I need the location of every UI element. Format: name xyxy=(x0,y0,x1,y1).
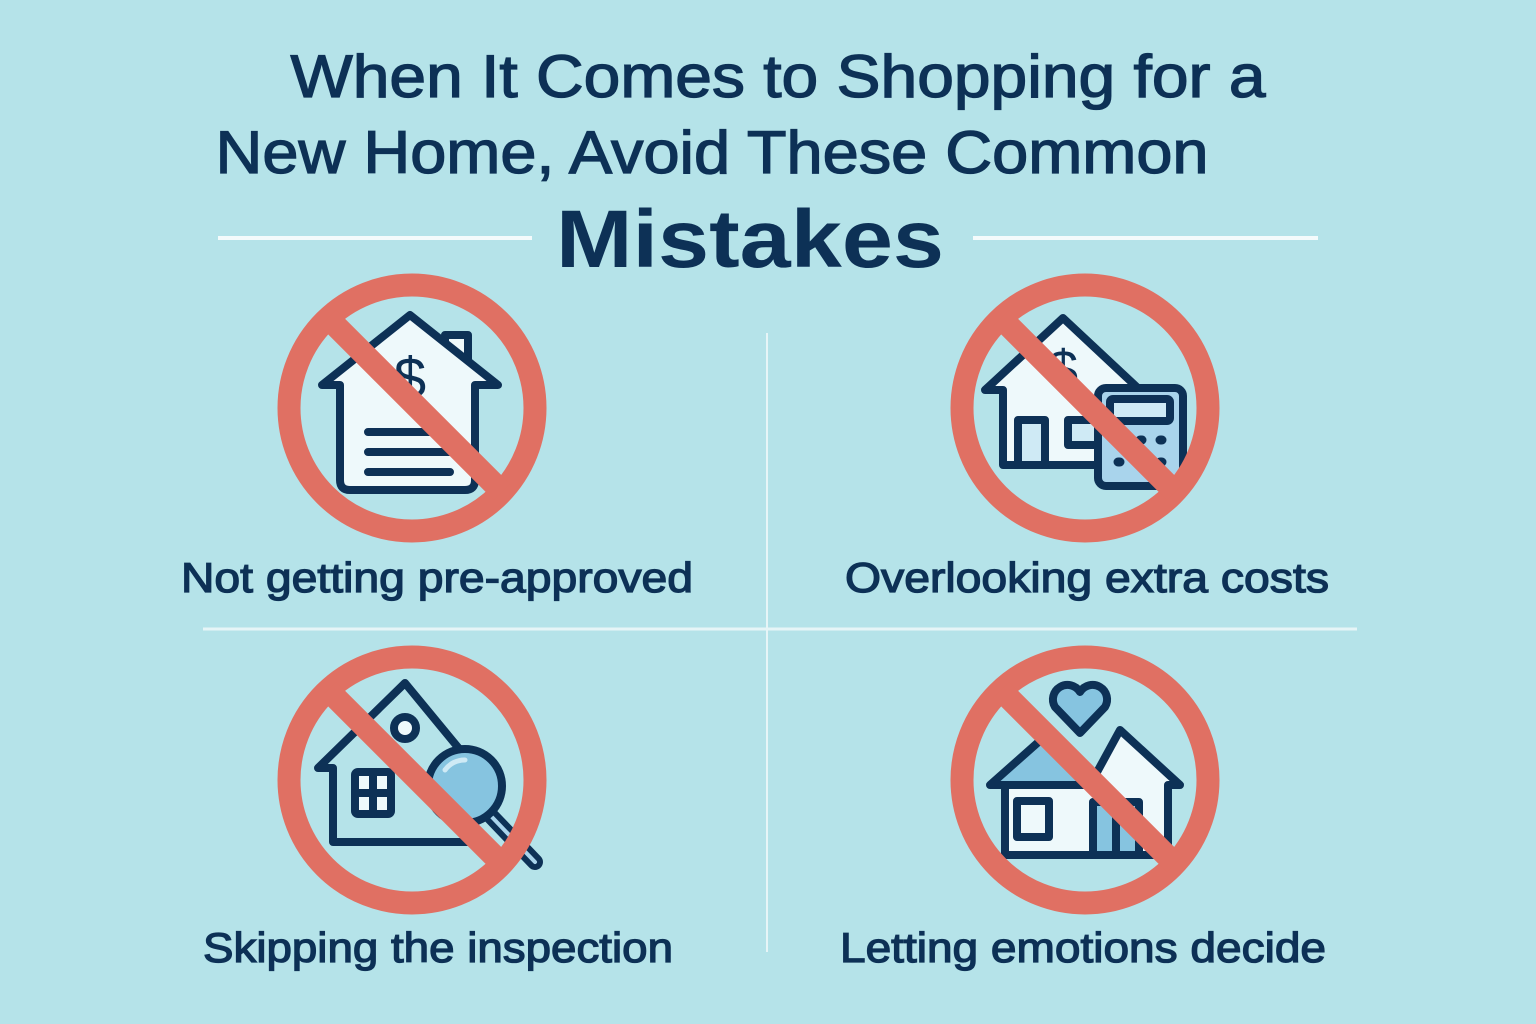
panel: overlooking extra costs xyxy=(845,285,1329,601)
title: Mistakes xyxy=(556,194,944,285)
icon: house with calculator xyxy=(985,318,1183,486)
icon: house with document xyxy=(322,315,498,490)
panel: not getting pre-approved xyxy=(181,285,693,601)
icon: house with calculator: $ xyxy=(1048,340,1078,400)
label: Overlooking extra costs xyxy=(845,554,1329,601)
icon: house with magnifier xyxy=(318,683,535,862)
icon: house with heart xyxy=(990,685,1180,855)
panel: skipping the inspection xyxy=(203,657,673,971)
icon: house with document: $ xyxy=(394,346,426,411)
icon: prohibition sign xyxy=(289,285,535,531)
icon: prohibition sign xyxy=(289,657,535,903)
title: New Home, Avoid These Common xyxy=(216,119,1208,186)
icon: prohibition sign xyxy=(962,657,1208,903)
icon: prohibition sign xyxy=(962,285,1208,531)
panel: letting emotions decide xyxy=(840,657,1326,971)
label: Letting emotions decide xyxy=(840,924,1326,971)
label: Not getting pre-approved xyxy=(181,554,693,601)
title: When It Comes to Shopping for a xyxy=(290,43,1266,110)
label: Skipping the inspection xyxy=(203,924,673,971)
title xyxy=(216,43,1266,285)
